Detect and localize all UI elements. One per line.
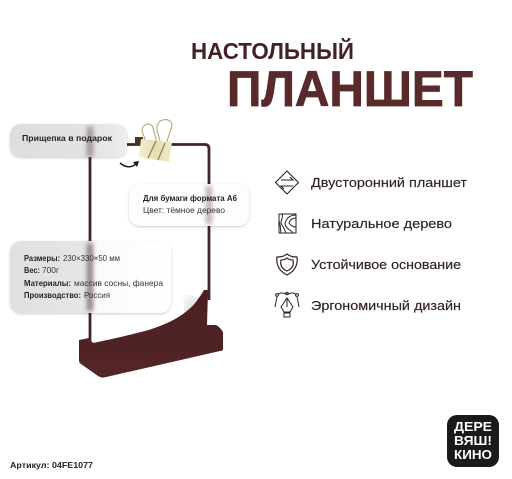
clip backing: [135, 137, 143, 145]
callout: paper format: [129, 184, 249, 226]
icon: pen tool: [275, 292, 299, 317]
feature: two-sided: Двусторонний планшет: [311, 175, 467, 190]
blurred rod: [206, 186, 212, 224]
article number: Артикул: 04FE1077: [10, 460, 93, 470]
logo: [447, 415, 499, 467]
size line: массив сосны, фанера: [74, 278, 163, 288]
wooden base: [79, 290, 223, 378]
icon: shield: [277, 254, 297, 275]
size line: Производство:: [24, 290, 81, 300]
wire frame: [90, 144, 209, 342]
size line: 230×330×50 мм: [63, 253, 120, 263]
clip handles: [142, 120, 172, 147]
blurred rod: [87, 127, 93, 157]
icon: wood grain: [279, 214, 296, 233]
clip body: [139, 139, 172, 162]
size line: Материалы:: [24, 278, 71, 288]
callout: clip gift: [10, 124, 127, 157]
arrow to clip: [120, 161, 139, 167]
product: tablet stand: [79, 144, 223, 378]
callout: specifications: [10, 241, 171, 313]
size line: Размеры:: [24, 253, 60, 263]
binder clip: [135, 120, 172, 162]
feature: ergonomic design: Эргономичный дизайн: [311, 298, 461, 313]
size line: Россия: [84, 290, 110, 300]
size line: [24, 253, 163, 300]
title: планшет: ПЛАНШЕТ: [227, 61, 473, 117]
clip inner arms: [148, 141, 165, 160]
size line: Вес:: [24, 265, 40, 275]
size line: 700г: [42, 265, 59, 275]
icon: two-sided arrows: [276, 171, 298, 194]
feature: stable base: Устойчивое основание: [311, 257, 461, 272]
logo: ВЯШ!: [454, 434, 492, 448]
blurred rod: [87, 243, 93, 311]
title: настольный: НАСТОЛЬНЫЙ: [191, 37, 354, 64]
feature: natural wood: Натуральное дерево: [311, 216, 452, 231]
logo: ДЕРЕ: [454, 420, 492, 434]
callout: clip gift: Прищепка в подарок: [22, 133, 113, 143]
callout: paper format: Цвет: тёмное дерево: [143, 205, 225, 215]
logo: КИНО: [454, 448, 492, 462]
callout: paper format: Для бумаги формата А6: [143, 193, 237, 203]
paper curl: [180, 295, 198, 313]
